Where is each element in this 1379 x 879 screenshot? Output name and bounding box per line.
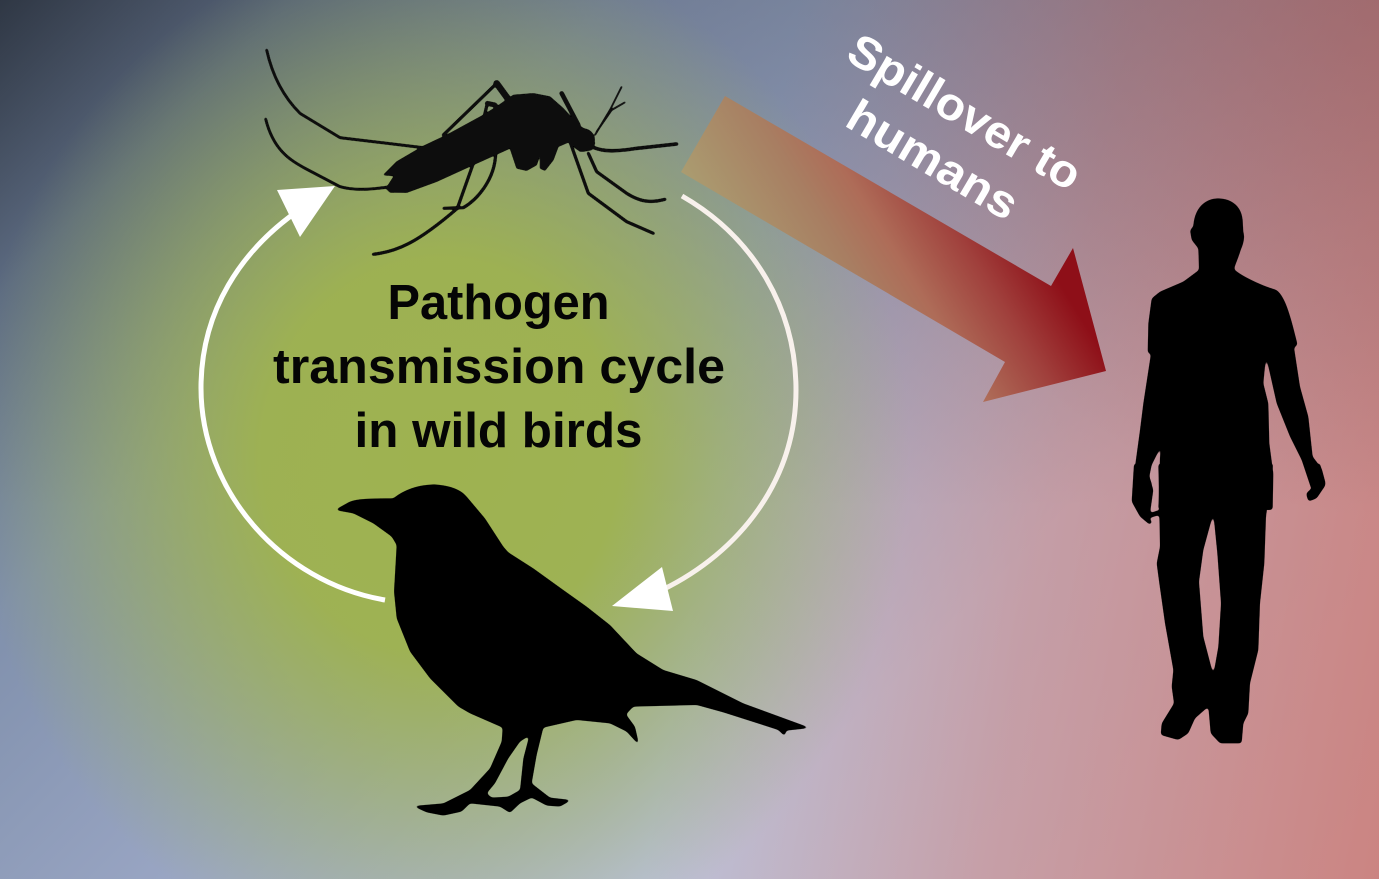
title: pathogen transmission cycle: in wild birds [354, 404, 642, 458]
title: pathogen transmission cycle: Pathogen [388, 276, 610, 330]
heading: spillover label: humans [838, 89, 1028, 230]
arrow: spillover to humans [681, 96, 1106, 402]
icon: mosquito silhouette [266, 50, 677, 254]
arrow: cycle from mosquito to bird [612, 196, 796, 611]
icon: human silhouette [1132, 198, 1326, 743]
arrow: cycle from bird to mosquito [201, 186, 385, 600]
title: pathogen transmission cycle [273, 276, 725, 458]
icon: bird silhouette [335, 484, 811, 816]
heading: spillover label: Spillover to [839, 23, 1091, 201]
title: pathogen transmission cycle: transmission cycle [273, 340, 725, 394]
